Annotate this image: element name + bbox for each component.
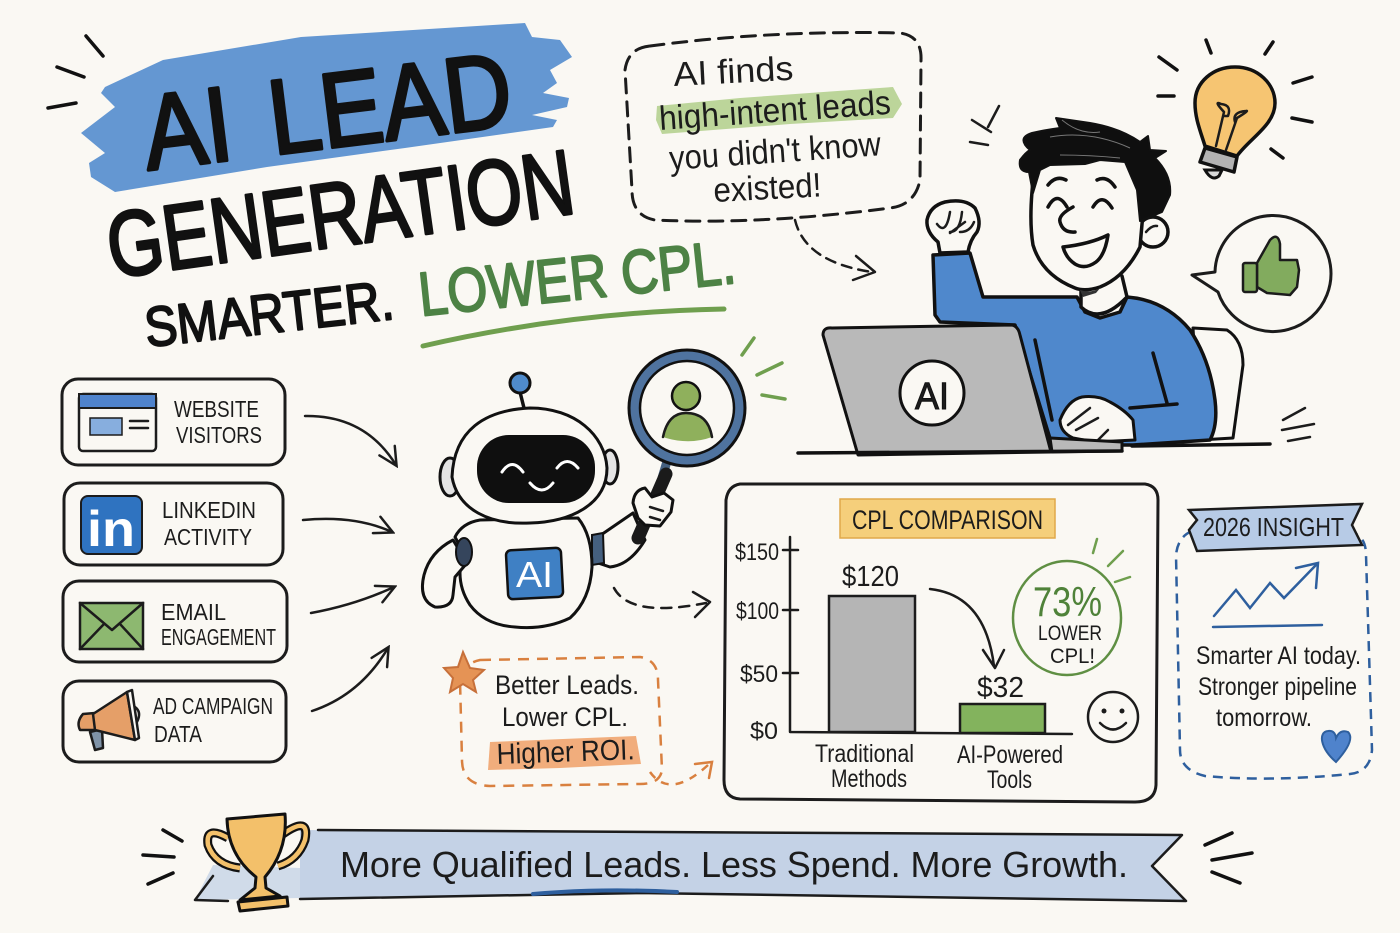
title spark lines bbox=[48, 36, 103, 108]
source: ad campaign data: AD CAMPAIGN bbox=[153, 693, 273, 719]
callout: better leads: Better Leads. bbox=[495, 670, 639, 700]
trend chart bbox=[1213, 563, 1322, 627]
character: person with laptop bbox=[798, 106, 1314, 455]
right arm bbox=[598, 513, 645, 567]
source: ad campaign data: DATA bbox=[154, 721, 203, 747]
title bbox=[48, 23, 739, 359]
hair bbox=[1020, 118, 1170, 221]
bubble arrow bbox=[795, 220, 872, 272]
body bbox=[455, 518, 592, 628]
head bbox=[1031, 150, 1145, 290]
title line: GENERATION: GENERATION bbox=[101, 131, 580, 298]
callout: better leads: Lower CPL. bbox=[502, 702, 628, 732]
source: website visitors: VISITORS bbox=[176, 422, 262, 448]
character: person with laptop: AI bbox=[915, 376, 949, 418]
bar chart: Traditional bbox=[815, 740, 914, 768]
source: linkedin activity: ACTIVITY bbox=[164, 524, 252, 550]
source: linkedin activity: in bbox=[87, 501, 135, 557]
bar chart: $150 bbox=[735, 539, 779, 566]
icon: star bbox=[444, 652, 484, 692]
bubble text: AI finds bbox=[672, 50, 794, 94]
panel: CPL comparison bbox=[724, 484, 1158, 802]
panel: 2026 insight bbox=[1176, 504, 1372, 779]
bottom banner bbox=[143, 814, 1252, 911]
icon: envelope bbox=[80, 603, 143, 649]
green underline bbox=[423, 309, 724, 346]
arrows to robot bbox=[303, 416, 396, 711]
neck bbox=[1080, 270, 1127, 314]
bar chart: Tools bbox=[987, 766, 1032, 794]
panel: 2026 insight: tomorrow. bbox=[1216, 704, 1312, 732]
bubble text: high-intent leads bbox=[658, 84, 892, 138]
left arm bbox=[422, 540, 467, 607]
robot hand bbox=[633, 488, 673, 526]
face bbox=[1048, 178, 1115, 267]
badge: 73% lower bbox=[1013, 539, 1130, 675]
banner tail left bbox=[195, 865, 300, 900]
source: email engagement: EMAIL bbox=[161, 599, 226, 625]
source: linkedin activity: LINKEDIN bbox=[162, 497, 256, 523]
bar chart: $50 bbox=[740, 661, 778, 688]
bubble text: you didn't know bbox=[668, 125, 882, 178]
raised fist bbox=[927, 201, 979, 253]
left ear bbox=[440, 458, 460, 496]
source: email engagement: ENGAGEMENT bbox=[161, 624, 276, 650]
bubble text: existed! bbox=[712, 166, 822, 210]
banner body bbox=[300, 830, 1186, 901]
callout: better leads bbox=[444, 652, 712, 786]
bar chart: $32 bbox=[977, 672, 1024, 704]
laptop base bbox=[1050, 438, 1122, 452]
laptop AI badge bbox=[900, 361, 964, 425]
sweater bbox=[933, 253, 1216, 445]
robot: AI bbox=[516, 554, 553, 595]
bar: AI powered bbox=[960, 704, 1045, 733]
source: email engagement bbox=[63, 581, 287, 662]
robot bbox=[422, 338, 785, 628]
laptop lid bbox=[823, 325, 1051, 455]
icon: thumbs up bubble bbox=[1192, 216, 1331, 332]
bar chart: $0 bbox=[750, 718, 778, 745]
bubble text bbox=[658, 50, 892, 210]
AI chest badge bbox=[506, 548, 563, 599]
source: website visitors: WEBSITE bbox=[174, 396, 259, 422]
bottom banner: More Qualified Leads. Less Spend. More Growth. bbox=[340, 844, 1128, 885]
bar chart: AI-Powered bbox=[957, 741, 1063, 769]
trend arrow bbox=[930, 589, 994, 666]
right ear bbox=[602, 450, 618, 484]
chin shadow bbox=[1080, 287, 1101, 297]
chair bbox=[1193, 328, 1243, 440]
highlight: high-intent bbox=[656, 87, 902, 134]
visor bbox=[477, 435, 595, 503]
insight text: Smarter AI today. bbox=[1196, 642, 1361, 670]
callout: better leads: Higher ROI. bbox=[496, 734, 635, 771]
hand bbox=[1060, 397, 1135, 442]
icon: browser bbox=[79, 394, 156, 451]
icon: light bulb bbox=[1158, 40, 1312, 178]
subtitle: smarter: SMARTER. bbox=[141, 268, 397, 359]
panel: 2026 insight: Stronger pipeline bbox=[1198, 673, 1357, 701]
robot to chart arrow bbox=[614, 588, 710, 617]
magnifying glass bbox=[629, 350, 745, 538]
ribbon heading bbox=[1189, 504, 1362, 551]
badge: 73% lower: CPL! bbox=[1050, 645, 1095, 668]
icon: smiley bbox=[1088, 692, 1138, 742]
source: website visitors bbox=[62, 379, 285, 465]
icon: megaphone bbox=[79, 690, 139, 750]
speech bubble bbox=[625, 33, 921, 280]
badge: 73% lower: 73% bbox=[1033, 578, 1102, 625]
icon: linkedin bbox=[81, 496, 142, 554]
highlight: higher ROI bbox=[488, 736, 641, 770]
bar chart: Methods bbox=[831, 765, 907, 793]
ear bbox=[1138, 217, 1168, 247]
bar chart bbox=[735, 537, 1072, 794]
title highlight brush bbox=[81, 23, 572, 192]
bar chart: $100 bbox=[736, 598, 779, 625]
title line: AI LEAD: AI LEAD bbox=[136, 31, 518, 193]
bar: traditional bbox=[829, 596, 915, 732]
icon: heart bbox=[1322, 731, 1350, 762]
badge: 73% lower: LOWER bbox=[1038, 622, 1102, 645]
source: ad campaign data bbox=[63, 681, 286, 762]
chart heading bbox=[840, 499, 1055, 538]
chart heading: CPL COMPARISON bbox=[852, 505, 1043, 535]
bar chart: $120 bbox=[842, 561, 899, 593]
icon: trophy bbox=[208, 814, 306, 911]
source: linkedin activity bbox=[64, 483, 283, 565]
head bbox=[452, 408, 607, 523]
ribbon heading: 2026 INSIGHT bbox=[1203, 512, 1344, 542]
subtitle: lower CPL: LOWER CPL. bbox=[415, 228, 739, 330]
